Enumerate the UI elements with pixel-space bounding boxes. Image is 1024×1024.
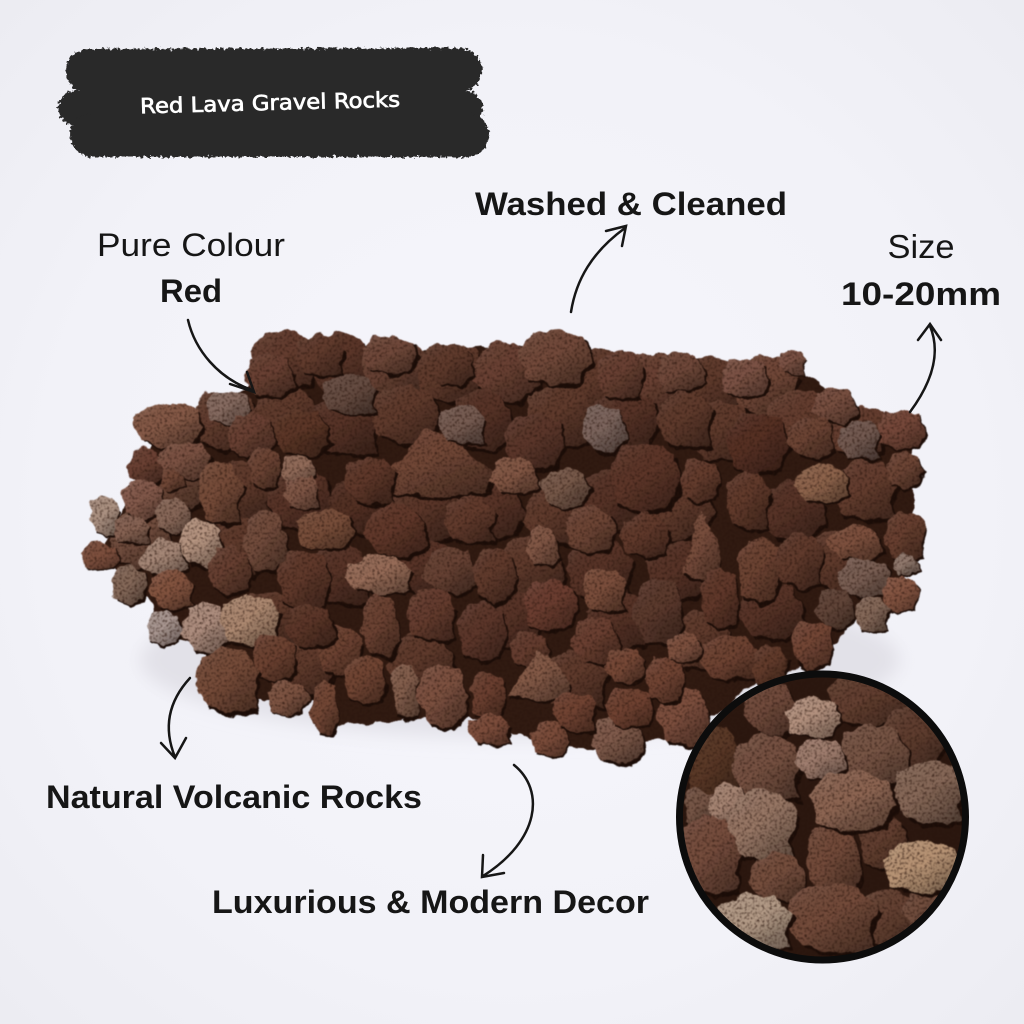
inset border bbox=[680, 674, 966, 960]
label: pure colour red: Red bbox=[160, 273, 222, 309]
inset close-up circle bbox=[676, 670, 969, 964]
label: pure colour red bbox=[97, 227, 285, 309]
arrow: to luxurious decor bbox=[482, 765, 533, 877]
title text: Red Lava Gravel Rocks bbox=[140, 88, 400, 118]
arrow: to natural volcanic rocks bbox=[161, 678, 190, 758]
arrow: from red bbox=[188, 320, 254, 392]
label: size: 10-20mm bbox=[841, 276, 1001, 312]
label: pure colour red: Pure Colour bbox=[97, 227, 285, 263]
pile base bbox=[100, 345, 915, 750]
arrow: to size bbox=[910, 324, 941, 412]
rock pile bbox=[81, 330, 927, 767]
label: size bbox=[841, 228, 1001, 312]
label: luxurious and modern decor: Luxurious & Modern Decor bbox=[212, 884, 649, 920]
label: washed and cleaned: Washed & Cleaned bbox=[475, 186, 787, 222]
arrow: to washed and cleaned bbox=[571, 226, 626, 312]
label: natural volcanic rocks: Natural Volcanic Rocks bbox=[46, 779, 422, 815]
brush stroke bbox=[75, 70, 467, 135]
pile shadow bbox=[140, 582, 900, 738]
label: size: Size bbox=[888, 228, 954, 265]
